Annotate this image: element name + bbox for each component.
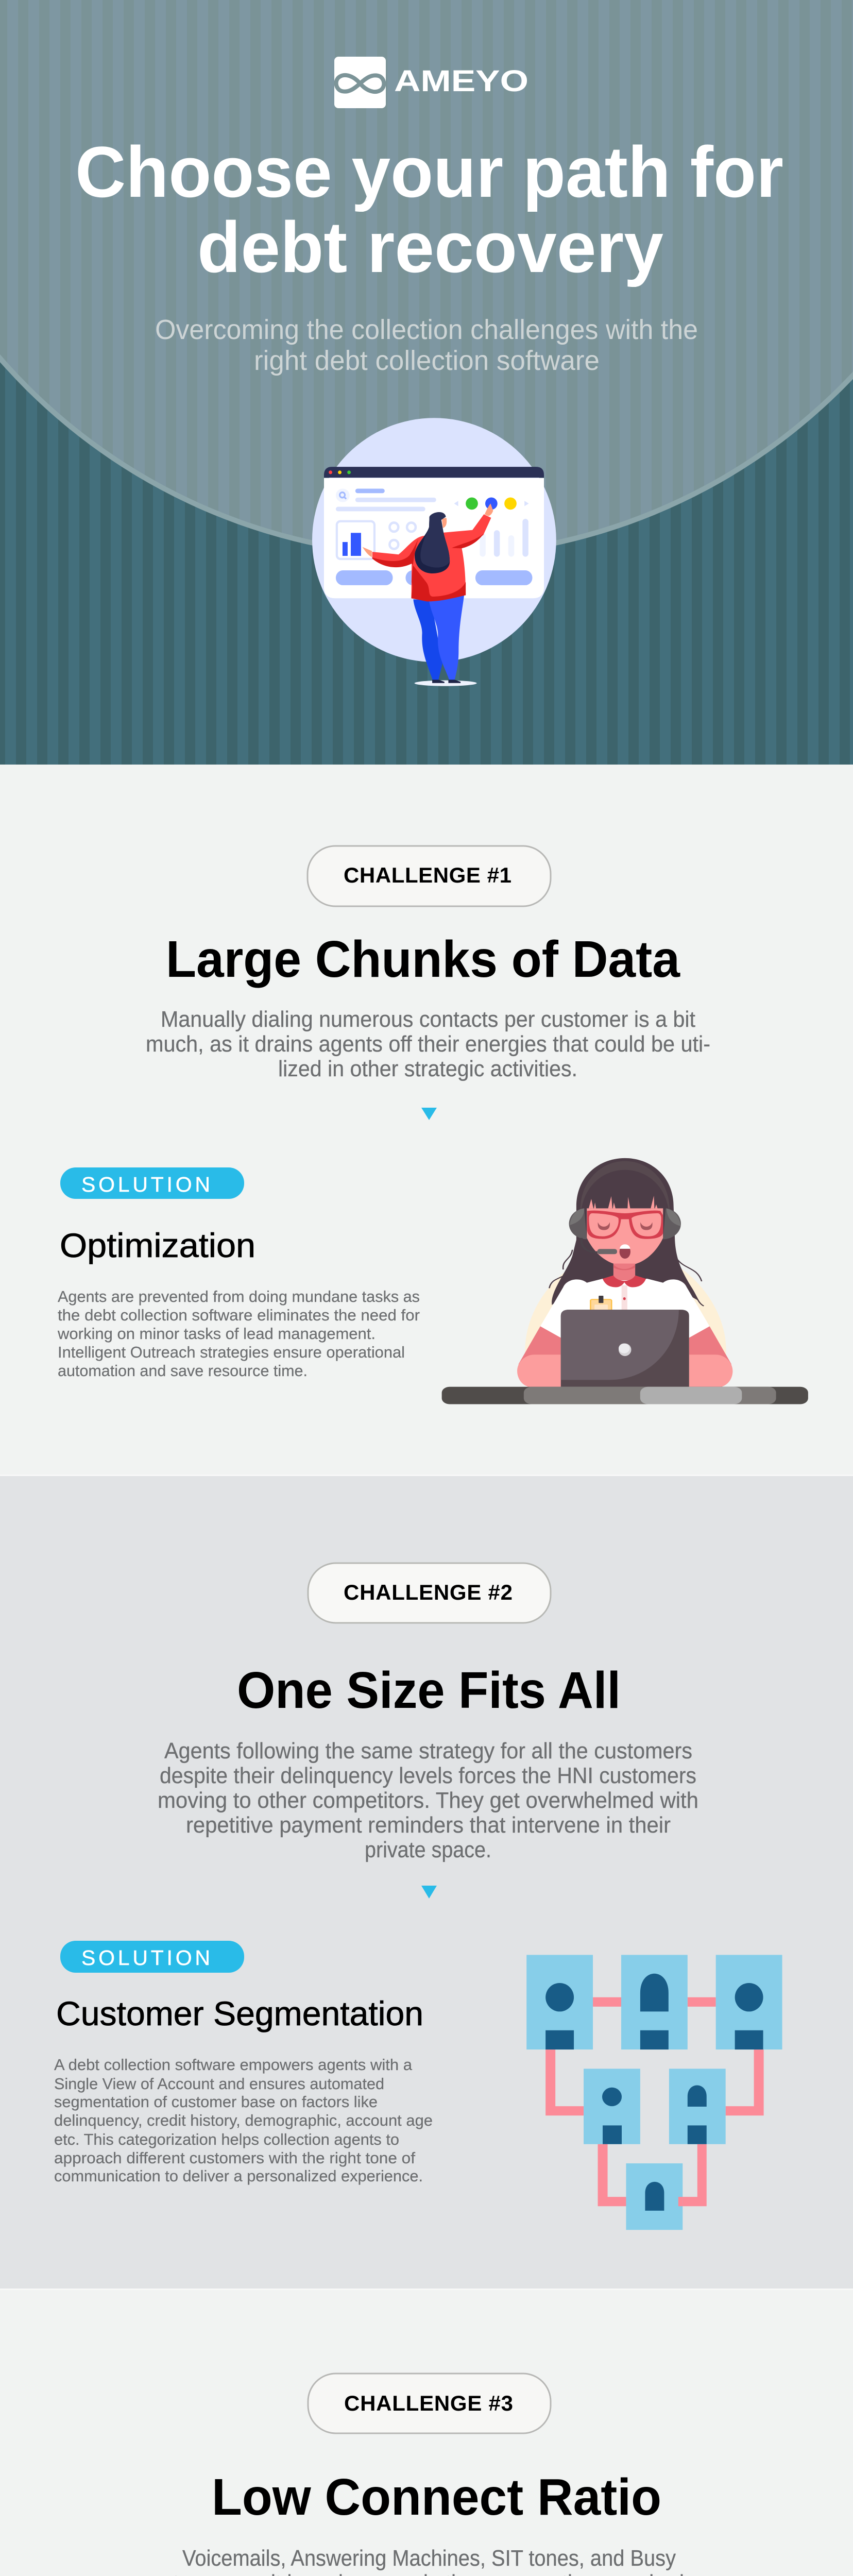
solution 2 badge: SOLUTION: [81, 1946, 210, 1970]
challenge 3 pill: CHALLENGE #3: [344, 2391, 513, 2415]
panel: challenge 3: [175, 2373, 683, 2576]
challenge 2 description: private space.: [365, 1837, 491, 1862]
logo: AMEYO: [394, 64, 528, 98]
challenge 1 heading: Large Chunks of Data: [166, 930, 680, 988]
challenge 2 pill: CHALLENGE #2: [344, 1580, 513, 1604]
solution 1 heading: Optimization: [60, 1226, 255, 1264]
subtitle: right debt collection software: [254, 345, 600, 376]
solution 1 description: [57, 1287, 420, 1380]
solution 1 description: the debt collection software eliminates the need for: [58, 1306, 420, 1324]
solution 2 badge: [60, 1941, 244, 1973]
challenge 2 description: [158, 1738, 698, 1862]
title: [75, 131, 783, 287]
solution 1 description: working on minor tasks of lead management.: [57, 1325, 376, 1343]
challenge 1 description: [146, 1007, 710, 1081]
challenge 2 pill: [308, 1563, 551, 1623]
challenge 1 description: Manually dialing numerous contacts per customer is a bit: [161, 1007, 695, 1032]
challenge 2 heading: One Size Fits All: [237, 1662, 621, 1719]
illustration: agent with headset and laptop: [442, 1158, 808, 1404]
subtitle: Overcoming the collection challenges with the: [155, 314, 698, 345]
challenge 3 description: Voicemails, Answering Machines, SIT tones, and Busy: [182, 2546, 676, 2571]
section divider 2: [0, 2289, 853, 2290]
challenge 1 description: much, as it drains agents off their energies that could be uti-: [146, 1031, 710, 1057]
illustration: customer segmentation tree: [526, 1955, 782, 2230]
challenge 2 description: repetitive payment reminders that intervene in their: [186, 1812, 671, 1838]
arrow: challenge 2: [421, 1886, 437, 1899]
solution 1 description: Intelligent Outreach strategies ensure operational: [58, 1343, 405, 1361]
challenge 2 description: Agents following the same strategy for all the customers: [164, 1738, 692, 1764]
solution 1 description: Agents are prevented from doing mundane tasks as: [58, 1287, 420, 1306]
challenge 2 description: moving to other competitors. They get overwhelmed with: [158, 1788, 698, 1813]
challenge 3 heading: Low Connect Ratio: [212, 2468, 661, 2526]
solution 2 description: communication to deliver a personalized experience.: [54, 2167, 423, 2185]
hero arc rim: [0, 0, 853, 558]
solution 2 description: etc. This categorization helps collection agents to: [54, 2130, 399, 2148]
logo: [334, 57, 528, 108]
challenge 1 pill: CHALLENGE #1: [344, 863, 511, 887]
arrow: challenge 1: [421, 1108, 437, 1120]
challenge 1 description: lized in other strategic activities.: [278, 1056, 577, 1081]
panel: challenge 2: [0, 1476, 853, 2289]
solution 2 description: approach different customers with the right tone of: [54, 2149, 415, 2167]
solution 1 badge: SOLUTION: [81, 1173, 210, 1196]
hero striped arc: [0, 0, 853, 553]
solution 2 description: delinquency, credit history, demographic, account age: [54, 2111, 433, 2129]
solution 2 heading: Customer Segmentation: [56, 1994, 423, 2032]
subtitle: [155, 314, 698, 376]
section divider 1: [0, 1475, 853, 1476]
solution 1 badge: [60, 1167, 244, 1199]
challenge 3 pill: [308, 2374, 551, 2433]
panel: challenge 1: [0, 765, 853, 1475]
title: Choose your path for: [75, 131, 783, 212]
solution 2 description: Single View of Account and ensures automated: [54, 2075, 384, 2093]
panel: hero: [0, 0, 853, 765]
solution 2 description: A debt collection software empowers agents with a: [54, 2056, 413, 2074]
illustration: woman at dashboard: [312, 418, 556, 686]
solution 2 description: [54, 2056, 433, 2185]
challenge 2 description: despite their delinquency levels forces the HNI customers: [160, 1763, 696, 1788]
hero striped teal background: [0, 0, 853, 765]
challenge 1 pill: [308, 846, 551, 906]
solution 2 description: segmentation of customer base on factors like: [54, 2093, 378, 2111]
title: debt recovery: [197, 207, 663, 287]
solution 1 description: automation and save resource time.: [58, 1362, 308, 1380]
